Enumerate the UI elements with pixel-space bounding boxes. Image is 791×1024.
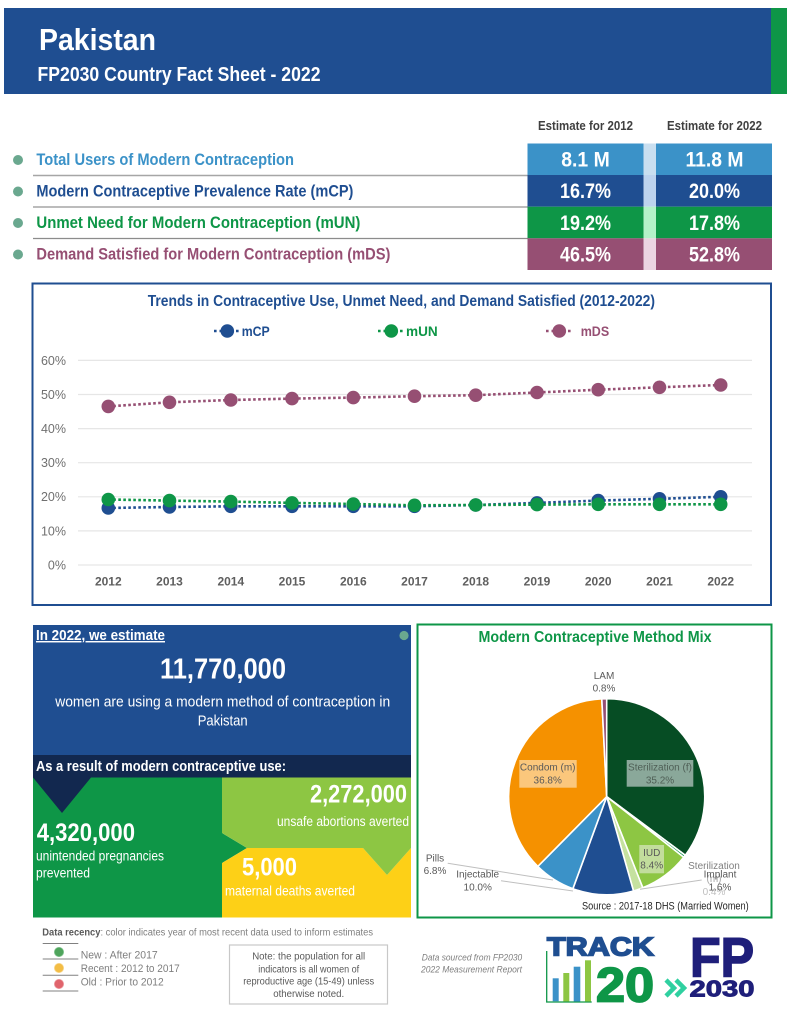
x axis labels: 2022 [707, 574, 734, 588]
chart legend: mCP [242, 323, 270, 339]
label: female sterilization [627, 760, 693, 787]
x axis labels: 2020 [585, 574, 612, 588]
row: mUN: 17.8% [689, 212, 740, 235]
legend: old: Old : Prior to 2012 [81, 977, 164, 989]
population note [230, 945, 388, 1004]
impact: unintended pregnancies: 4,320,000 [37, 819, 135, 847]
label: pills [424, 854, 447, 877]
gridlines [78, 360, 752, 565]
y axis labels [41, 354, 66, 572]
series: mDS [102, 378, 728, 413]
legend: recent: Recent : 2012 to 2017 [81, 963, 180, 975]
label: condom: 36.8% [534, 775, 562, 786]
impact: unsafe abortions: 2,272,000 [310, 781, 407, 809]
indicator table [13, 118, 772, 270]
header banner: FP2030 Country Fact Sheet - 2022 [38, 64, 320, 86]
population note: indicators is all women of [258, 964, 359, 975]
panel: method mix [418, 624, 772, 918]
row: mCP [13, 175, 772, 207]
label: pills: 6.8% [424, 866, 447, 877]
y axis labels: 40% [41, 422, 66, 436]
x axis labels: 2017 [401, 574, 428, 588]
label: pills: Pills [426, 854, 444, 865]
population note: reproductive age (15-49) unless [243, 977, 374, 988]
row: mUN: Unmet Need for Modern Contraception (mUN) [36, 214, 360, 232]
impact: unintended pregnancies: prevented [36, 866, 90, 881]
row: mUN [13, 207, 772, 238]
x axis labels [95, 574, 734, 588]
panel: 2022 estimate [33, 625, 411, 755]
panel: trends chart [32, 284, 771, 605]
label: implant: Implant [704, 870, 737, 881]
y axis labels: 60% [41, 354, 66, 368]
row: mCP: 16.7% [560, 180, 611, 203]
pie source: Source : 2017-18 DHS (Married Women) [582, 900, 749, 912]
impact: unintended pregnancies: unintended pregnancies [36, 849, 164, 864]
logo: Track20: 20 [596, 960, 654, 1012]
label: implant [704, 870, 737, 894]
x axis labels: 2021 [646, 574, 673, 588]
x axis labels: 2016 [340, 574, 367, 588]
indicator table: Estimate for 2012 [538, 118, 633, 133]
row: mCP: Modern Contraceptive Prevalence Rate (mCP) [36, 182, 353, 200]
population note: Note: the population for all [252, 952, 365, 963]
row: total users [13, 144, 772, 175]
x axis labels: 2015 [279, 574, 306, 588]
x axis labels: 2019 [524, 574, 551, 588]
row: mDS: Demand Satisfied for Modern Contraception (mDS) [36, 246, 390, 264]
panel: impact of contraceptive use [33, 755, 411, 918]
result banner [33, 755, 411, 813]
label: injectable: 10.0% [464, 883, 492, 894]
x axis labels: 2012 [95, 574, 122, 588]
row: mDS: 52.8% [689, 244, 740, 266]
x axis labels: 2014 [217, 574, 244, 588]
icon: chevrons [666, 980, 684, 996]
label: female sterilization: Sterilization (f) [628, 763, 692, 774]
label: LAM [593, 671, 616, 695]
y axis labels: 50% [41, 388, 66, 402]
result banner: As a result of modern contraceptive use: [36, 758, 286, 775]
data recency legend [42, 928, 373, 991]
panel: 2022 estimate: In 2022, we estimate [36, 628, 165, 644]
pie chart [509, 699, 705, 895]
label: IUD [639, 845, 664, 873]
data source note [420, 952, 523, 975]
x axis labels: 2013 [156, 574, 183, 588]
logo: Track20: TRACK [547, 932, 654, 962]
chart legend [214, 323, 609, 339]
legend: new [54, 947, 158, 961]
data source note: 2022 Measurement Report [420, 964, 522, 975]
series: mUN [102, 493, 728, 512]
label: condom [519, 760, 577, 788]
panel: 2022 estimate: Pakistan [198, 713, 248, 730]
impact: maternal deaths: maternal deaths averted [225, 884, 355, 899]
label: injectable [456, 870, 500, 894]
data recency legend: Data recency: color indicates year of most recent data used to inform estimates [42, 928, 373, 939]
x axis labels: 2018 [462, 574, 489, 588]
chart title: Trends in Contraceptive Use, Unmet Need, and Demand Satisfied (2012-2022) [148, 293, 655, 310]
label: IUD: 8.4% [640, 860, 663, 871]
label: female sterilization: 35.2% [646, 775, 674, 786]
label: male sterilization: (m) [706, 874, 722, 885]
population note: otherwise noted. [273, 989, 344, 1000]
chart legend: mUN [406, 323, 438, 339]
row: total users: 11.8 M [686, 148, 744, 172]
series: mCP [102, 490, 728, 515]
y axis labels: 20% [41, 490, 66, 504]
row: total users: Total Users of Modern Contraception [36, 151, 294, 169]
y axis labels: 30% [41, 456, 66, 470]
y axis labels: 0% [48, 558, 66, 572]
impact: maternal deaths [222, 848, 411, 918]
row: mCP: 20.0% [689, 180, 740, 203]
row: mDS [13, 238, 772, 270]
header banner [4, 8, 787, 94]
label: implant: 1.6% [709, 883, 732, 894]
label: male sterilization: 0.4% [703, 887, 726, 898]
label: LAM: LAM [594, 671, 614, 682]
impact: unsafe abortions [222, 777, 411, 875]
legend: new: New : After 2017 [81, 949, 158, 961]
data source note: Data sourced from FP2030 [422, 952, 523, 963]
y axis labels: 10% [41, 524, 66, 538]
label: injectable: Injectable [456, 870, 500, 881]
row: mDS: 46.5% [560, 244, 611, 266]
label: LAM: 0.8% [593, 684, 616, 695]
row: total users: 8.1 M [561, 148, 610, 172]
logo: FP2030 [666, 926, 754, 1002]
impact: unintended pregnancies [33, 777, 247, 918]
method mix title: Modern Contraceptive Method Mix [478, 629, 712, 646]
label: IUD: IUD [643, 848, 660, 859]
logo: FP2030: 2030 [690, 976, 754, 1002]
label: condom: Condom (m) [520, 763, 575, 774]
label: male sterilization: Sterilization [688, 861, 740, 872]
impact: unsafe abortions: unsafe abortions averted [277, 814, 409, 829]
panel: 2022 estimate: 11,770,000 [160, 654, 286, 686]
logo: Track20 [547, 932, 654, 1012]
label: male sterilization [688, 861, 740, 898]
indicator table: Estimate for 2022 [667, 118, 762, 133]
header banner: Pakistan [39, 22, 156, 57]
chart legend: mDS [581, 323, 609, 339]
pie leader lines [448, 863, 702, 891]
row: mUN: 19.2% [560, 212, 611, 235]
impact: maternal deaths: 5,000 [242, 854, 297, 882]
logo: FP2030: FP [690, 926, 754, 988]
panel: 2022 estimate: women are using a modern method of contraception in [54, 694, 390, 711]
